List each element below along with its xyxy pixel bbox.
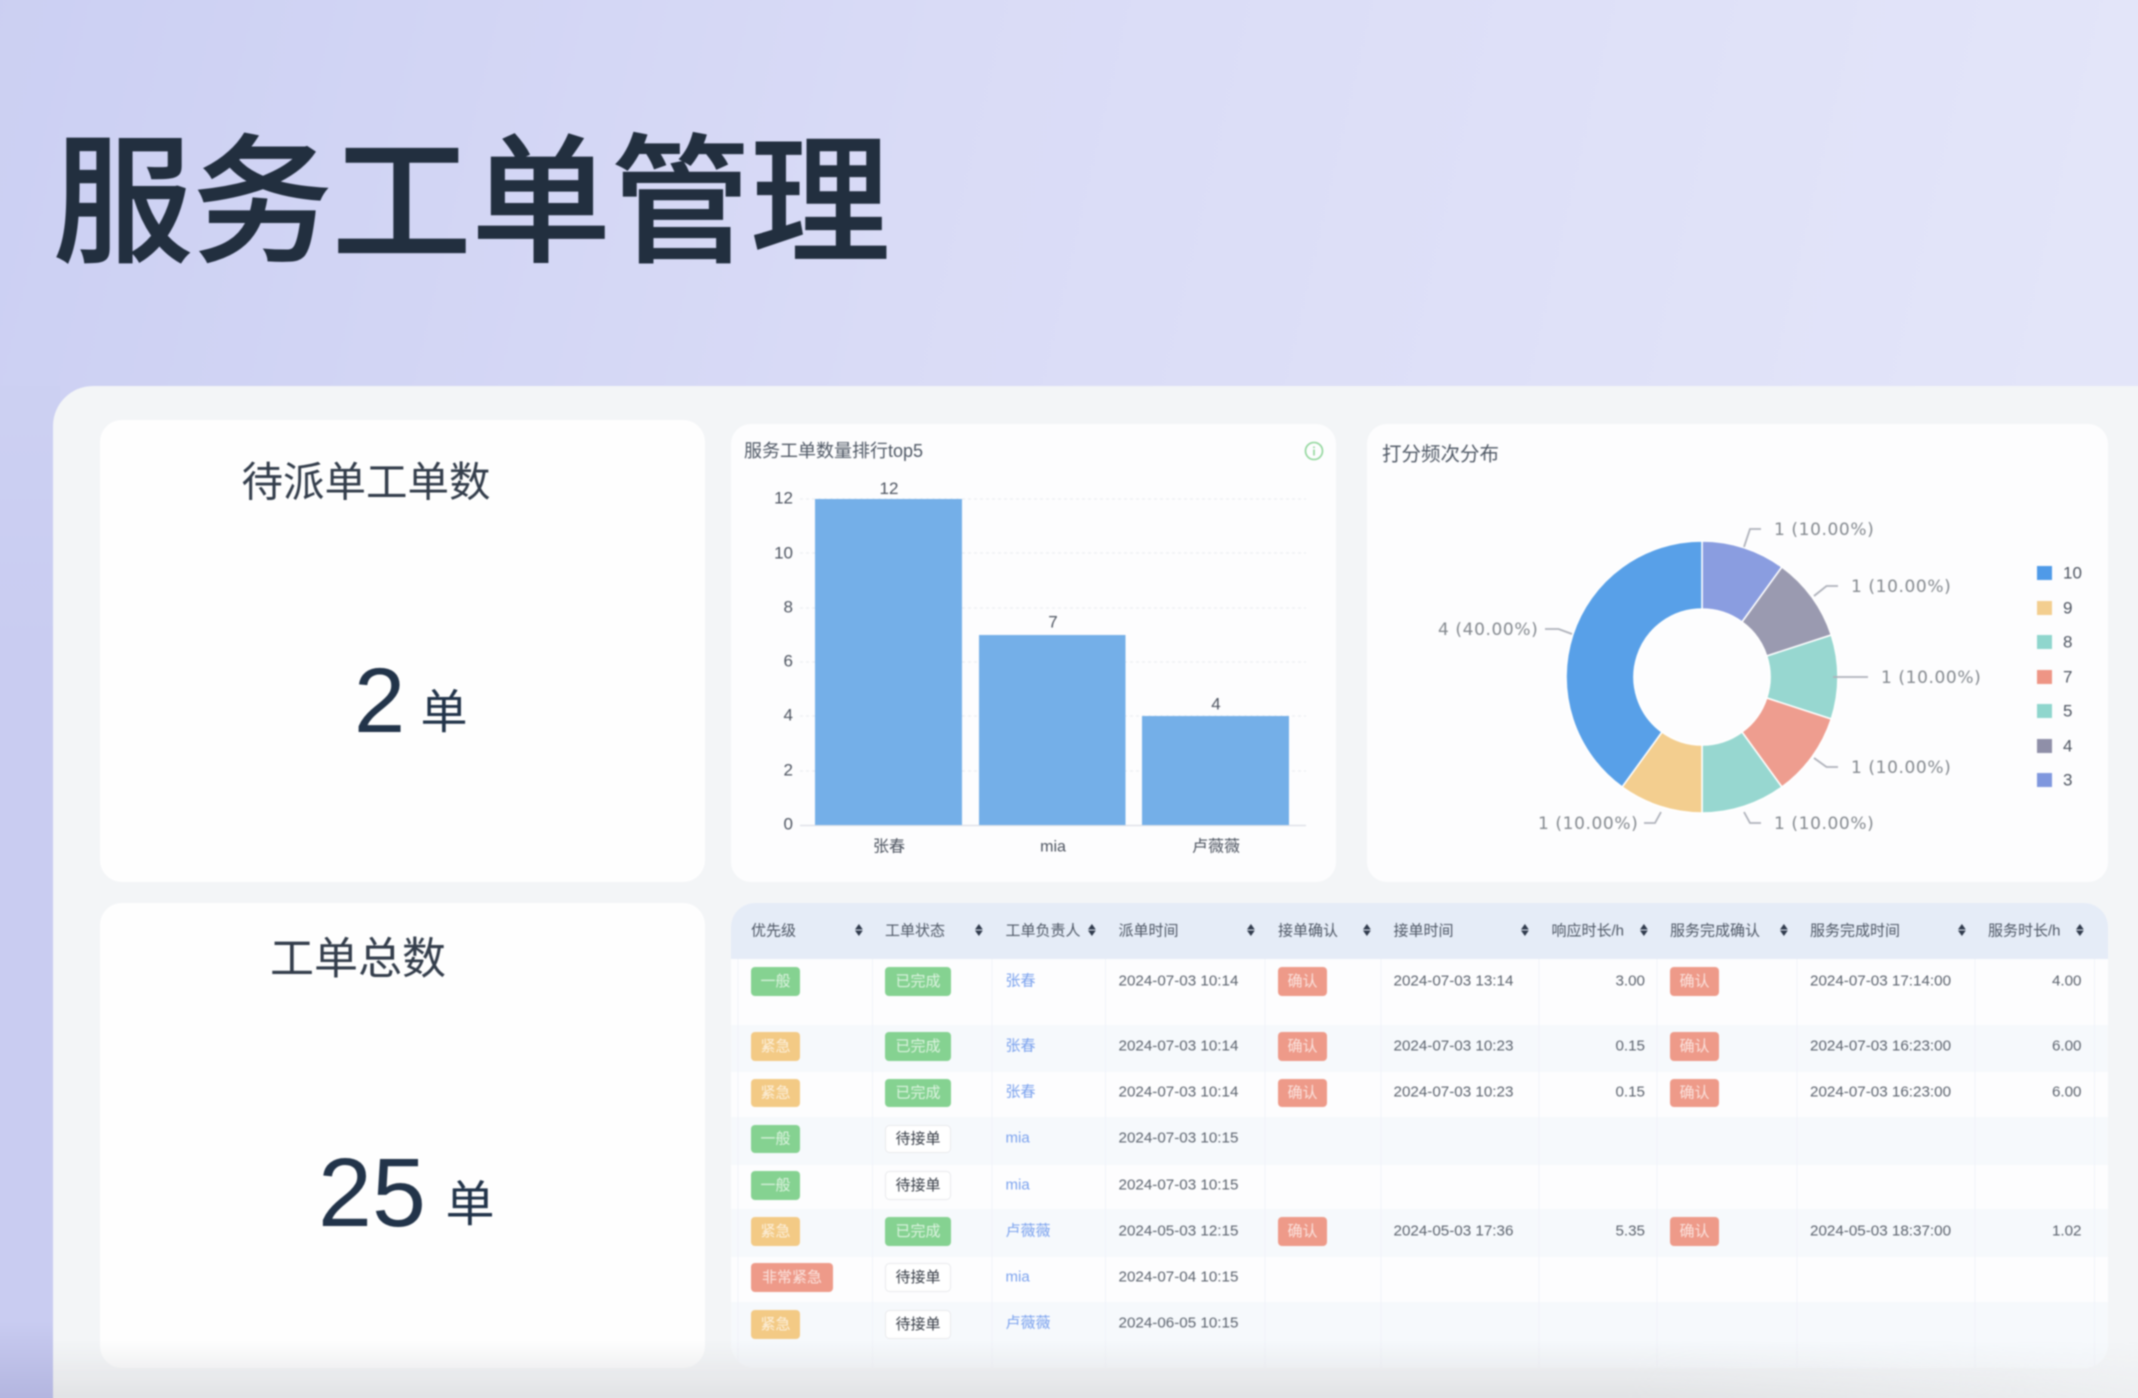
- row 6: 已完成: [895, 1223, 941, 1240]
- row 1: 一般: [760, 973, 791, 990]
- row 1: 4.00: [2052, 972, 2082, 990]
- row 3: 紧急: [760, 1084, 791, 1102]
- row 3: 张春: [1006, 1084, 1036, 1100]
- row 5: [751, 1171, 1238, 1200]
- chart title: 服务工单数量排行top5: [744, 441, 923, 461]
- main dashboard panel: [53, 386, 2138, 1398]
- slice labels: 1 (10.00%): [1538, 814, 1638, 834]
- row 3: 已完成: [895, 1084, 941, 1102]
- row 4: 待接单: [895, 1130, 941, 1148]
- metric: 25 orders: 25: [318, 1138, 426, 1247]
- row 7: 非常紧急: [762, 1269, 822, 1286]
- row 2: 2024-07-03 10:23: [1394, 1038, 1513, 1054]
- row 2: 确认: [1679, 1038, 1710, 1055]
- row 1: 2024-07-03 10:14: [1118, 972, 1238, 990]
- row 6: 卢薇薇: [1006, 1222, 1051, 1240]
- row 3: 2024-07-03 10:23: [1394, 1084, 1513, 1100]
- bar value labels: 12: [880, 479, 898, 498]
- row 1: [751, 967, 2082, 996]
- table header: 服务时长/h: [1988, 922, 2061, 940]
- legend: [2037, 564, 2082, 790]
- y axis labels: [774, 488, 793, 834]
- row 6: 2024-05-03 17:36: [1394, 1222, 1513, 1240]
- row 1: 张春: [1006, 972, 1036, 990]
- panel: work order table: [731, 903, 2108, 1368]
- row 1: 已完成: [895, 973, 941, 990]
- x axis labels: [873, 838, 1240, 856]
- table header: 接单时间: [1394, 922, 1454, 940]
- row 2: 确认: [1287, 1038, 1318, 1055]
- slice labels: 1 (10.00%): [1881, 668, 1981, 688]
- row 7: 待接单: [895, 1269, 941, 1286]
- y axis labels: 4: [784, 706, 793, 724]
- row 8: [751, 1310, 1238, 1339]
- legend: 5: [2063, 702, 2072, 720]
- row 3: 2024-07-03 10:14: [1118, 1084, 1238, 1100]
- chart title: 打分频次分布: [1382, 444, 1499, 466]
- bar value labels: 4: [1211, 694, 1221, 714]
- panel: total orders: [100, 903, 705, 1368]
- x axis labels: mia: [1040, 838, 1066, 856]
- legend: 7: [2063, 668, 2072, 686]
- leader lines: [1545, 529, 1868, 823]
- row 7: mia: [1006, 1268, 1030, 1286]
- row 1: 确认: [1679, 973, 1710, 990]
- row 4: [751, 1125, 1238, 1153]
- y axis labels: 0: [784, 814, 793, 834]
- panel: pending dispatch count: [100, 420, 705, 882]
- row 6: [751, 1217, 2082, 1246]
- donut: [1566, 541, 1838, 813]
- slice labels: 1 (10.00%): [1851, 758, 1951, 778]
- row 2: [751, 1032, 2082, 1061]
- row 2: 紧急: [760, 1038, 791, 1055]
- slice labels: 1 (10.00%): [1774, 520, 1874, 540]
- legend: 3: [2063, 770, 2072, 790]
- y axis labels: 6: [784, 652, 793, 670]
- row 5: 2024-07-03 10:15: [1118, 1176, 1238, 1194]
- bars: [815, 499, 1289, 825]
- row 3: 6.00: [2052, 1084, 2082, 1100]
- row 6: 紧急: [760, 1223, 791, 1240]
- row 2: 2024-07-03 16:23:00: [1810, 1038, 1951, 1054]
- bar value labels: 7: [1048, 612, 1058, 632]
- row 8: 卢薇薇: [1006, 1314, 1051, 1332]
- legend: 10: [2063, 564, 2082, 582]
- row 1: 2024-07-03 17:14:00: [1810, 972, 1951, 990]
- row 2: 张春: [1006, 1038, 1036, 1054]
- row 7: [751, 1263, 1238, 1292]
- heading: pending dispatch: 待派单工单数: [241, 458, 491, 506]
- row 6: 2024-05-03 18:37:00: [1810, 1222, 1951, 1240]
- row 6: 确认: [1287, 1223, 1318, 1240]
- row 4: 一般: [760, 1130, 791, 1148]
- slice labels: 1 (10.00%): [1851, 577, 1951, 597]
- row 8: 待接单: [895, 1316, 941, 1333]
- bar value labels: [880, 479, 1221, 714]
- metric: 25 orders: [318, 1138, 495, 1247]
- legend: 8: [2063, 632, 2072, 652]
- table header: 服务完成确认: [1670, 922, 1760, 940]
- row 5: mia: [1006, 1176, 1030, 1194]
- row 1: 2024-07-03 13:14: [1394, 972, 1513, 990]
- row 6: 1.02: [2052, 1222, 2082, 1240]
- row 1: 3.00: [1615, 972, 1645, 990]
- row 3: 2024-07-03 16:23:00: [1810, 1084, 1951, 1100]
- metric: 2 orders: [354, 650, 468, 752]
- y axis labels: 12: [774, 488, 793, 508]
- row 8: 2024-06-05 10:15: [1118, 1314, 1238, 1332]
- metric: 25 orders: 单: [446, 1178, 495, 1232]
- table header: 优先级: [751, 922, 796, 940]
- table header: [731, 903, 2108, 959]
- row 6: 2024-05-03 12:15: [1118, 1222, 1238, 1240]
- icon: info: [1306, 442, 1322, 460]
- row 4: mia: [1006, 1130, 1030, 1146]
- row 8: 紧急: [760, 1316, 791, 1333]
- row 2: 0.15: [1615, 1038, 1645, 1054]
- row 2: 已完成: [895, 1038, 941, 1055]
- panel: top5 bar chart: [731, 424, 1336, 882]
- heading: total orders: 工单总数: [270, 934, 446, 984]
- table header: 工单状态: [885, 922, 945, 940]
- metric: 2 orders: 2: [354, 650, 405, 752]
- row 3: 0.15: [1615, 1084, 1645, 1100]
- row 5: 待接单: [895, 1177, 941, 1194]
- table header: 派单时间: [1118, 922, 1179, 940]
- row 7: 2024-07-04 10:15: [1118, 1268, 1238, 1286]
- table header: 服务完成时间: [1810, 922, 1900, 940]
- row 4: 2024-07-03 10:15: [1118, 1130, 1238, 1146]
- row 3: 确认: [1287, 1084, 1318, 1102]
- y axis labels: 10: [774, 544, 793, 562]
- panel: score donut chart: [1367, 424, 2108, 882]
- row 3: [751, 1079, 2082, 1107]
- row 6: 确认: [1679, 1223, 1710, 1240]
- title: 服务工单管理: [53, 125, 890, 281]
- slice labels: 4 (40.00%): [1438, 620, 1538, 640]
- row 3: 确认: [1679, 1084, 1710, 1102]
- x axis labels: 卢薇薇: [1192, 838, 1240, 856]
- row 6: 5.35: [1615, 1222, 1645, 1240]
- x axis labels: 张春: [873, 838, 905, 856]
- row 2: 2024-07-03 10:14: [1118, 1038, 1238, 1054]
- legend: 9: [2063, 598, 2072, 618]
- metric: 2 orders: 单: [420, 686, 468, 738]
- y axis labels: 8: [784, 598, 793, 616]
- bottom fade: [53, 1358, 2066, 1398]
- row 1: 确认: [1287, 973, 1318, 990]
- row 2: 6.00: [2052, 1038, 2082, 1054]
- legend: 4: [2063, 736, 2072, 756]
- slice labels: 1 (10.00%): [1774, 814, 1874, 834]
- table header: 响应时长/h: [1552, 922, 1624, 940]
- table header: 接单确认: [1278, 922, 1338, 940]
- y axis labels: 2: [784, 760, 793, 780]
- row 5: 一般: [760, 1177, 791, 1194]
- slice labels: [1438, 520, 1981, 834]
- table header: 工单负责人: [1006, 922, 1081, 940]
